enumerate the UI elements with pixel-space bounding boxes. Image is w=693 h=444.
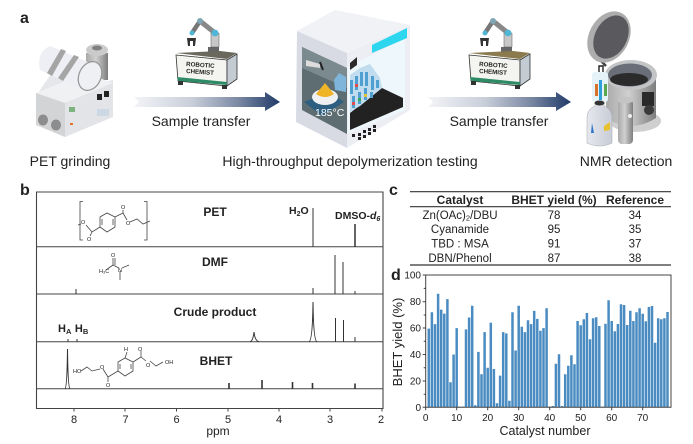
x axis tick labels: 20 bbox=[482, 413, 494, 424]
icon: NMR instrument bbox=[579, 4, 661, 146]
label: PET grinding: PET grinding bbox=[30, 153, 110, 169]
icon: robotic chemist 1: ROBOTIC bbox=[186, 61, 215, 70]
table rows: TBD : MSA bbox=[431, 238, 489, 250]
BHET structure: HO bbox=[73, 369, 82, 375]
DMF structure bbox=[99, 253, 129, 280]
x axis tick labels: 50 bbox=[575, 413, 587, 424]
panel label a: a bbox=[20, 10, 29, 27]
DMF structure: N bbox=[118, 268, 122, 274]
BHET structure bbox=[73, 347, 173, 389]
icon: high-throughput testing cabinet bbox=[296, 10, 410, 148]
DMF spectrum bbox=[76, 255, 355, 294]
BHET structure: O bbox=[100, 365, 105, 371]
x axis tick labels: 8 bbox=[71, 414, 77, 426]
panel: c catalyst table bbox=[389, 182, 671, 265]
icon: robotic chemist 1 bbox=[176, 18, 237, 89]
y axis tick labels bbox=[404, 270, 421, 414]
chart axes and ticks bbox=[423, 275, 671, 410]
x axis tick labels: 7 bbox=[122, 414, 129, 426]
panel label c: c bbox=[389, 182, 398, 199]
label: sample transfer 1: Sample transfer bbox=[152, 113, 251, 129]
table rows: 78 bbox=[548, 210, 560, 222]
x axis tick labels: 10 bbox=[451, 413, 463, 424]
table rows: DBN/Phenol bbox=[428, 253, 492, 265]
panel label d: d bbox=[391, 267, 401, 284]
PET structure: O bbox=[81, 220, 86, 226]
y axis tick labels: 80 bbox=[410, 297, 421, 308]
y axis tick labels: 40 bbox=[410, 350, 421, 361]
spectrum labels: PET bbox=[203, 205, 227, 219]
BHET structure: H bbox=[124, 347, 128, 353]
label: sample transfer 2: Sample transfer bbox=[450, 113, 549, 129]
table rows: Cyanamide bbox=[431, 224, 489, 236]
x axis tick labels: 6 bbox=[173, 414, 180, 426]
panel: a workflow bbox=[20, 4, 672, 169]
BHET structure: O bbox=[106, 383, 111, 389]
x axis title: ppm bbox=[206, 424, 230, 438]
x axis title: Catalyst number bbox=[499, 424, 591, 438]
bars: BHET yield by catalyst bbox=[429, 294, 668, 407]
y axis title: BHET yield (%) bbox=[390, 298, 405, 386]
panel label b: b bbox=[20, 182, 30, 199]
DMF structure: H₃C bbox=[99, 269, 109, 275]
x axis tick labels: 3 bbox=[327, 414, 333, 426]
x axis tick labels bbox=[71, 414, 384, 426]
icon: robotic chemist 2: ROBOTIC bbox=[479, 61, 508, 70]
peak label: HA HB: A bbox=[66, 327, 72, 336]
x axis tick labels: 0 bbox=[423, 413, 429, 424]
spectra frame and baselines bbox=[36, 192, 383, 412]
PET spectrum bbox=[313, 208, 355, 247]
x axis tick labels: 60 bbox=[606, 413, 618, 424]
PET structure: O bbox=[121, 205, 126, 211]
peak label: water: 2 bbox=[297, 211, 301, 218]
peak label: DMSO: 6 bbox=[376, 216, 380, 223]
icon: high-throughput testing cabinet: 185°C bbox=[315, 107, 345, 119]
table rows: Zn(OAc) bbox=[422, 210, 466, 222]
peak label: water: H bbox=[289, 205, 297, 217]
table rows: 95 bbox=[548, 224, 560, 236]
icon: robotic chemist 2: CHEMIST bbox=[479, 68, 507, 77]
peak label: DMSO: DMSO-d bbox=[335, 210, 376, 222]
x axis tick labels: 2 bbox=[378, 414, 384, 426]
x axis tick labels: 40 bbox=[544, 413, 556, 424]
peak label: HA HB: H bbox=[75, 323, 83, 335]
PET structure: O bbox=[126, 221, 131, 227]
table header: Catalyst bbox=[437, 193, 483, 207]
y axis tick labels: 100 bbox=[404, 270, 421, 282]
y axis tick labels: 20 bbox=[410, 376, 421, 388]
spectrum labels: DMF bbox=[202, 255, 228, 269]
arrow: sample transfer 2 bbox=[428, 92, 571, 111]
label: high-throughput testing: High-throughput depolymerization testing bbox=[222, 153, 478, 169]
icon: PET grinder bbox=[36, 44, 113, 137]
table rows: /DBU bbox=[470, 210, 498, 222]
table rows bbox=[422, 210, 642, 265]
table rows: 2 bbox=[466, 214, 470, 222]
spectrum labels: BHET bbox=[200, 354, 233, 368]
BHET spectrum bbox=[65, 349, 355, 389]
PET structure bbox=[78, 202, 150, 243]
table rows: 37 bbox=[629, 238, 641, 250]
peak label: HA HB: H bbox=[58, 323, 66, 335]
table header: Reference bbox=[606, 193, 664, 207]
table rows: 87 bbox=[548, 253, 560, 265]
arrow: sample transfer 1 bbox=[134, 92, 280, 111]
x axis tick labels: 70 bbox=[637, 413, 649, 424]
peak label: HA HB: B bbox=[83, 327, 89, 336]
spectrum labels: Crude product bbox=[174, 305, 256, 319]
DMF structure: O bbox=[111, 253, 116, 259]
table header: BHET yield (%) bbox=[511, 193, 597, 207]
y axis tick labels: 0 bbox=[415, 403, 421, 414]
BHET structure: O bbox=[138, 347, 143, 353]
x axis tick labels: 4 bbox=[276, 414, 282, 426]
table header bbox=[437, 193, 664, 207]
crude product spectrum bbox=[68, 302, 355, 342]
spectrum labels bbox=[174, 205, 256, 368]
table rows: 91 bbox=[548, 238, 560, 250]
icon: robotic chemist 2 bbox=[469, 18, 530, 89]
table rows: 34 bbox=[629, 210, 642, 222]
x axis tick labels: 5 bbox=[225, 414, 231, 426]
BHET structure: OH bbox=[165, 360, 173, 366]
x axis tick labels: 30 bbox=[513, 413, 525, 424]
PET structure: O bbox=[87, 237, 92, 243]
table rows: 35 bbox=[629, 224, 641, 236]
panel: b NMR spectra bbox=[20, 182, 384, 438]
y axis tick labels: 60 bbox=[410, 324, 421, 334]
table rows: 38 bbox=[629, 253, 641, 265]
peak label: water: O bbox=[300, 205, 309, 217]
icon: robotic chemist 1: CHEMIST bbox=[186, 68, 214, 77]
table rules bbox=[410, 192, 671, 265]
BHET structure: O bbox=[146, 363, 151, 369]
x axis tick labels bbox=[423, 413, 649, 424]
label: NMR detection: NMR detection bbox=[580, 153, 672, 169]
panel: d bar chart bbox=[390, 267, 671, 438]
